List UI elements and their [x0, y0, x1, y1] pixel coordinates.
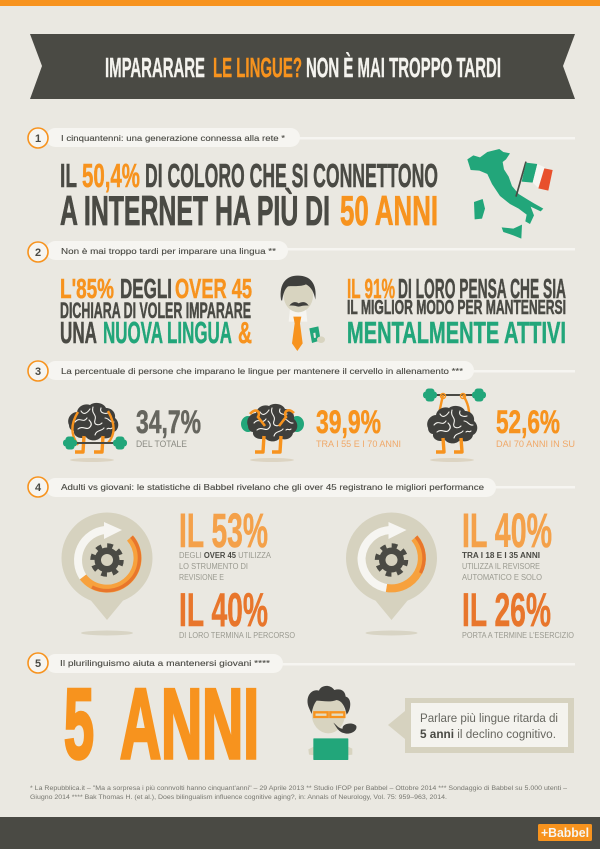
section 5	[28, 653, 575, 779]
section 1 heading: 1	[35, 133, 41, 145]
statistic 52,6%: 52,6%	[496, 404, 560, 440]
left statistic 85%: OVER 45	[175, 273, 252, 304]
left statistic 85%: DEGLI	[120, 273, 172, 304]
left statistic 85%	[60, 273, 252, 350]
headline section 1	[60, 158, 438, 234]
big number 5 anni	[64, 668, 259, 779]
section 2 heading: 2	[35, 247, 41, 259]
section 4 heading: 4	[35, 482, 42, 494]
icon: brain overhead press	[423, 388, 486, 462]
statistic 52,6%: DAI 70 ANNI IN SU	[496, 439, 575, 449]
footnotes	[30, 785, 567, 801]
callout speech box: 5 anni il declino cognitivo.	[420, 727, 556, 741]
title text: LE LINGUE?	[213, 52, 302, 83]
big number 5 anni: ANNI	[120, 668, 259, 779]
headline section 1: 50,4%	[82, 158, 140, 195]
big number 5 anni: 5	[64, 668, 94, 779]
section 4 heading	[28, 477, 575, 497]
section 2 heading	[28, 241, 575, 262]
section 4 heading: Adulti vs giovani: le statistiche di Babbel rivelano che gli over 45 registrano le migliori performance	[61, 482, 484, 492]
icon: brain curl	[241, 404, 304, 462]
section 4	[28, 477, 575, 640]
section 5 heading: 5	[35, 658, 41, 670]
section 2	[28, 241, 575, 351]
statistic 40% young: UTILIZZA IL REVISORE	[462, 561, 540, 571]
left statistic 85%: DICHIARA DI VOLER IMPARARE	[60, 298, 251, 323]
statistic 39,9%: 39,9%	[316, 404, 381, 440]
section 5 heading	[28, 653, 575, 673]
banner ribbon	[30, 34, 575, 99]
statistic 40% over 45: DI LORO TERMINA IL PERCORSO	[179, 630, 295, 640]
section 3 heading: La percentuale di persone che imparano le lingue per mantenere il cervello in allenamento ***	[61, 366, 464, 376]
statistic 53%: REVISIONE E	[179, 572, 224, 582]
icon: brain deadlift	[63, 403, 127, 462]
statistic 40% young: AUTOMATICO E SOLO	[462, 572, 542, 582]
left statistic 85%: UNA	[60, 315, 97, 350]
headline section 1: A INTERNET HA PIÙ DI	[60, 186, 330, 234]
left statistic 85%: L'85%	[60, 273, 114, 304]
title text	[105, 52, 501, 83]
callout speech box	[388, 698, 574, 753]
top orange bar	[0, 0, 600, 6]
headline section 1: 50 ANNI	[340, 187, 438, 234]
statistic 39,9%: TRA I 55 E I 70 ANNI	[316, 439, 401, 449]
footer	[0, 817, 600, 849]
footnotes: Giugno 2014 **** Bak Thomas H. (et al.), Does bilingualism influence cognitive aging?, in: Annals of Neurology, Vol. 75: 959–963, 2014.	[30, 794, 447, 801]
section 1 heading: I cinquantenni: una generazione connessa alla rete *	[61, 133, 286, 143]
icon: man with glasses and pipe	[308, 686, 356, 760]
statistic 34,7%: 34,7%	[136, 404, 201, 440]
title text: IMPARARARE	[105, 52, 205, 83]
section 1	[28, 128, 575, 239]
icon: pin with gear, young	[346, 512, 437, 636]
Babbel logo: +Babbel	[541, 826, 589, 840]
icon: man with tie and phone	[281, 276, 325, 351]
right statistic 91%	[347, 273, 566, 350]
left statistic 85%: NUOVA LINGUA	[103, 315, 232, 350]
section 3 heading	[28, 361, 575, 381]
statistic 26%: PORTA A TERMINE L'ESERCIZIO	[462, 630, 574, 640]
right statistic 91%: IL 91%	[347, 273, 395, 304]
headline section 1: IL	[60, 158, 77, 195]
left statistic 85%: &	[238, 315, 252, 350]
section 5 heading: Il plurilinguismo aiuta a mantenersi giovani ****	[60, 658, 271, 668]
section 3 heading: 3	[35, 366, 41, 378]
statistic 40% young: TRA I 18 E I 35 ANNI	[462, 550, 540, 560]
title banner	[30, 34, 575, 99]
statistic 53%: DEGLI OVER 45 UTILIZZA	[179, 550, 271, 560]
statistic 40% over 45: IL 40%	[179, 583, 268, 636]
icon: map of Italy with flag	[467, 149, 553, 239]
statistic 53%	[179, 505, 271, 582]
statistic 53%: LO STRUMENTO DI	[179, 561, 248, 571]
section 3	[28, 361, 575, 462]
section 1 heading	[28, 128, 575, 148]
statistic 53%: IL 53%	[179, 505, 268, 558]
icon: pin with gear, over 45	[62, 512, 152, 636]
statistic 40% young	[462, 505, 552, 582]
statistic 34,7%: DEL TOTALE	[136, 439, 187, 449]
footer bar	[0, 817, 600, 849]
callout speech box: Parlare più lingue ritarda di	[420, 711, 558, 725]
section 2 heading: Non è mai troppo tardi per imparare una lingua **	[61, 246, 277, 256]
statistic 34,7%	[136, 404, 201, 449]
footnotes: * La Repubblica.it – "Ma a sorpresa i più connvolti hanno cinquant'anni" – 29 Aprile 2013 ** Studio IFOP per Babbel – Ottobre 2014 *** Sondaggio di Babbel su 5.000 utenti –	[30, 785, 567, 792]
